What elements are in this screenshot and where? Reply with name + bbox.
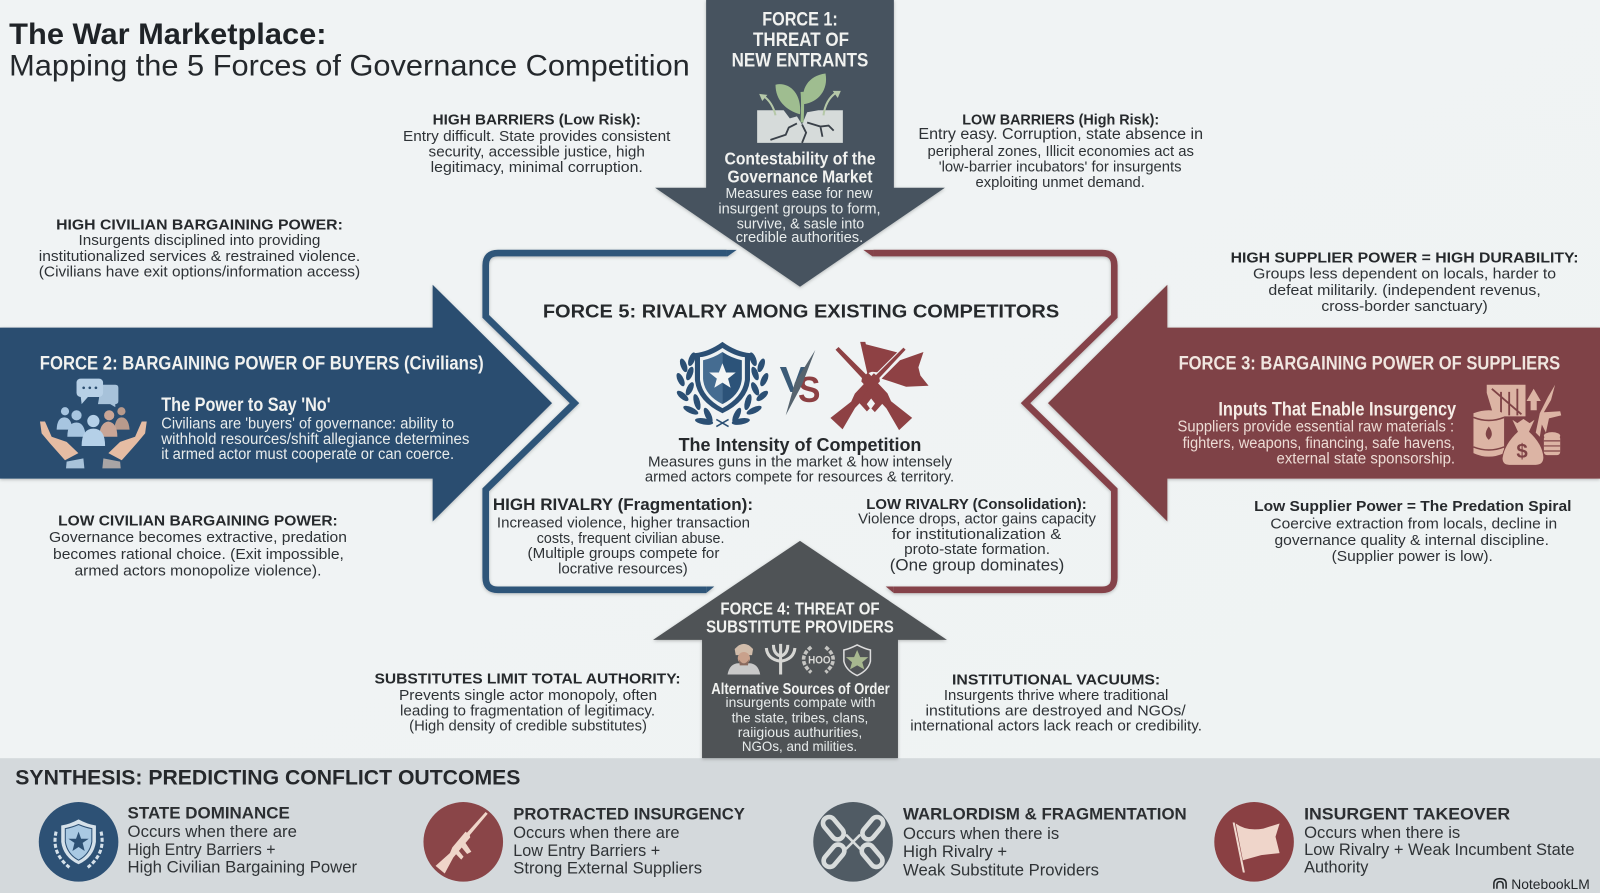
icons: alternative providers bbox=[728, 644, 870, 676]
heading: force 1: FORCE 1: bbox=[762, 9, 838, 31]
panel: force 3 bargaining power of suppliers bbox=[1048, 285, 1600, 521]
text: insurgent takeover bbox=[1304, 805, 1574, 876]
panel: force 4 threat of substitute providers bbox=[653, 541, 947, 758]
text: warlordism: Weak Substitute Providers bbox=[903, 862, 1099, 880]
text block: low rivalry: Violence drops, actor gains capacity bbox=[858, 511, 1097, 527]
heading: force 4 bbox=[706, 598, 894, 637]
text block: high supplier power bbox=[1231, 250, 1579, 315]
text block: low rivalry: (One group dominates) bbox=[890, 556, 1064, 574]
text block: force 4 description: raiigious authurities, bbox=[738, 725, 862, 740]
text block: low supplier power: (Supplier power is low). bbox=[1332, 549, 1493, 565]
title bbox=[9, 18, 690, 83]
text block: low supplier power bbox=[1254, 499, 1571, 565]
text block: high rivalry: costs, frequent civilian abuse. bbox=[537, 531, 724, 547]
heading: force 4: SUBSTITUTE PROVIDERS bbox=[706, 617, 894, 637]
text block: high supplier power: defeat militarily. (independent revenus, bbox=[1268, 283, 1541, 299]
icon: flag badge bbox=[1214, 802, 1294, 882]
text block: high civilian bargaining power: (Civilians have exit options/information access) bbox=[39, 265, 360, 281]
title: The War Marketplace: bbox=[9, 18, 327, 51]
text block: force 3 description: fighters, weapons, financing, safe havens, bbox=[1183, 435, 1455, 452]
text block: low barriers: exploiting unmet demand. bbox=[976, 175, 1145, 191]
icon: crossed rifles and flag bbox=[822, 342, 929, 437]
outcome: state dominance bbox=[39, 802, 358, 882]
text block: substitutes limit authority: leading to fragmentation of legitimacy. bbox=[400, 703, 655, 719]
text block: high rivalry: locrative resources) bbox=[558, 561, 688, 577]
text: protracted insurgency: Low Entry Barriers + bbox=[513, 842, 660, 860]
text: insurgent takeover: Low Rivalry + Weak Incumbent State bbox=[1304, 841, 1574, 859]
text: protracted insurgency: PROTRACTED INSURGENCY bbox=[513, 805, 745, 823]
subheading: the power to say no: The Power to Say 'No' bbox=[161, 394, 331, 416]
text: state dominance: STATE DOMINANCE bbox=[128, 804, 290, 822]
text: protracted insurgency bbox=[513, 805, 745, 877]
text block: substitutes limit authority: SUBSTITUTES LIMIT TOTAL AUTHORITY: bbox=[374, 672, 681, 688]
outcome: protracted insurgency bbox=[423, 802, 745, 882]
icon: shield badge bbox=[39, 802, 118, 882]
frame: red right bracket bbox=[863, 250, 1114, 593]
text block: institutional vacuums: institutions are destroyed and NGOs/ bbox=[926, 703, 1187, 719]
text block: high supplier power: cross-border sanctuary) bbox=[1321, 299, 1488, 315]
panel: synthesis band bbox=[0, 758, 1600, 893]
text block: institutional vacuums: INSTITUTIONAL VACUUMS: bbox=[952, 673, 1160, 689]
text block: low civilian bargaining power: Governance becomes extractive, predation bbox=[49, 530, 347, 546]
text block: high rivalry: (Multiple groups compete for bbox=[528, 546, 719, 562]
text block: intensity description bbox=[645, 454, 954, 486]
text block: force 1 description: insurgent groups to form, bbox=[718, 201, 881, 217]
text block: high rivalry: Increased violence, higher transaction bbox=[497, 516, 750, 532]
text block: high rivalry: HIGH RIVALRY (Fragmentation): bbox=[493, 495, 753, 514]
text block: low civilian bargaining power: armed actors monopolize violence). bbox=[74, 564, 321, 580]
icon: star shield bbox=[844, 645, 870, 676]
arrow: force 2 bbox=[0, 285, 552, 521]
icon: versus: V bbox=[780, 360, 807, 400]
text: warlordism: Occurs when there is bbox=[903, 825, 1059, 843]
heading: force 5: FORCE 5: RIVALRY AMONG EXISTING COMPETITORS bbox=[543, 300, 1059, 321]
icon: HOO laurel bbox=[804, 647, 833, 672]
text block: high civilian bargaining power: Insurgents disciplined into providing bbox=[79, 233, 320, 249]
text block: low supplier power: Coercive extraction from locals, decline in bbox=[1270, 517, 1557, 533]
text block: low civilian bargaining power: LOW CIVILIAN BARGAINING POWER: bbox=[58, 514, 338, 530]
text block: high supplier power: Groups less dependent on locals, harder to bbox=[1253, 267, 1556, 283]
icon: versus bbox=[780, 350, 820, 415]
panel: force 5 rivalry frame bbox=[486, 250, 1114, 593]
text block: force 4 description bbox=[726, 695, 876, 754]
text block: institutional vacuums: international actors lack reach or credibility. bbox=[910, 719, 1202, 735]
text block: force 1 description: credible authorities. bbox=[736, 230, 863, 246]
frame: blue left bracket bbox=[486, 250, 737, 593]
subheading: inputs that enable insurgency: Inputs That Enable Insurgency bbox=[1218, 398, 1456, 420]
text block: low supplier power: Low Supplier Power = The Predation Spiral bbox=[1254, 499, 1571, 515]
text block: high civilian bargaining power: institutionalized services & restrained violence. bbox=[39, 249, 360, 265]
arrow: force 3 bbox=[1048, 285, 1600, 521]
text block: force 1 description bbox=[718, 186, 881, 246]
icon: supplies crate barrel money rifle: $ bbox=[1516, 441, 1528, 463]
text block: high rivalry bbox=[493, 495, 753, 577]
text block: institutional vacuums bbox=[910, 673, 1202, 735]
icon: broken chains badge bbox=[813, 802, 893, 882]
text block: low supplier power: governance quality & internal discipline. bbox=[1274, 533, 1549, 549]
text block: high supplier power: HIGH SUPPLIER POWER = HIGH DURABILITY: bbox=[1231, 250, 1579, 266]
heading: force 1: NEW ENTRANTS bbox=[732, 49, 868, 71]
text block: institutional vacuums: Insurgents thrive where traditional bbox=[944, 688, 1168, 704]
text block: force 1 description: survive, & sasle into bbox=[737, 217, 864, 233]
heading: force 2: FORCE 2: BARGAINING POWER OF BUYERS (Civilians) bbox=[40, 352, 484, 374]
text block: force 2 description: Civilians are 'buyers' of governance: ability to bbox=[161, 416, 454, 433]
text block: high civilian bargaining power bbox=[39, 218, 360, 281]
text block: low barriers: peripheral zones, Illicit economies act as bbox=[928, 144, 1194, 160]
text block: force 3 description: Suppliers provide essential raw materials : bbox=[1178, 419, 1454, 436]
heading: force 1: THREAT OF bbox=[753, 29, 849, 51]
heading: force 4: FORCE 4: THREAT OF bbox=[720, 598, 880, 618]
icon: supplies crate barrel money rifle bbox=[1473, 385, 1561, 465]
heading: synthesis: SYNTHESIS: PREDICTING CONFLICT OUTCOMES bbox=[15, 766, 520, 790]
text block: low rivalry: LOW RIVALRY (Consolidation): bbox=[866, 497, 1087, 513]
panel: force 2 bargaining power of buyers bbox=[0, 285, 552, 521]
text: state dominance: High Entry Barriers + bbox=[128, 841, 276, 859]
text: warlordism: WARLORDISM & FRAGMENTATION bbox=[903, 805, 1187, 823]
logo: NotebookLM: NotebookLM bbox=[1511, 877, 1590, 892]
text block: intensity description: armed actors compete for resources & territory. bbox=[645, 470, 954, 486]
icon: rifle badge bbox=[423, 802, 503, 882]
text block: high barriers: HIGH BARRIERS (Low Risk): bbox=[433, 113, 641, 129]
text block: low barriers: 'low-barrier incubators' for insurgents bbox=[939, 159, 1182, 175]
text block: force 2 description bbox=[160, 416, 470, 463]
text: protracted insurgency: Occurs when there are bbox=[513, 824, 680, 842]
arrow: force 1 bbox=[655, 0, 945, 287]
outcome: warlordism and fragmentation bbox=[813, 802, 1187, 882]
text block: low rivalry bbox=[858, 497, 1097, 574]
heading: intensity of competition: The Intensity of Competition bbox=[679, 434, 921, 455]
text: state dominance bbox=[128, 804, 358, 876]
outcome: insurgent takeover bbox=[1214, 802, 1574, 882]
text block: force 2 description: withhold resources/shift allegiance determines bbox=[160, 431, 470, 448]
text block: force 3 description: external state sponsorship. bbox=[1277, 450, 1455, 467]
text: warlordism: High Rivalry + bbox=[903, 843, 1007, 861]
text block: low civilian bargaining power: becomes rational choice. (Exit impossible, bbox=[53, 547, 344, 563]
text block: low civilian bargaining power bbox=[49, 514, 347, 580]
icon: tribal elder bbox=[728, 644, 760, 675]
text block: force 2 description: it armed actor must cooperate or can coerce. bbox=[161, 446, 454, 463]
subheading: contestability bbox=[724, 148, 876, 187]
text block: force 1 description: Measures ease for new bbox=[726, 186, 873, 202]
subheading: alternative sources of order: Alternative Sources of Order bbox=[711, 681, 890, 698]
icon: civilians in open hands bbox=[40, 379, 147, 468]
text block: force 3 description bbox=[1178, 419, 1455, 467]
heading: force 1 bbox=[732, 9, 868, 71]
text: protracted insurgency: Strong External Suppliers bbox=[513, 859, 702, 877]
text block: substitutes limit authority: Prevents single actor monopoly, often bbox=[399, 688, 657, 704]
text block: low rivalry: for institutionalization & bbox=[892, 527, 1061, 543]
text block: intensity description: Measures guns in the market & how intensely bbox=[648, 454, 953, 470]
title: Mapping the 5 Forces of Governance Competition bbox=[9, 50, 690, 83]
text block: force 4 description: NGOs, and milities. bbox=[742, 739, 857, 754]
text block: substitutes limit authority bbox=[374, 672, 681, 735]
text block: substitutes limit authority: (High density of credible substitutes) bbox=[409, 719, 647, 735]
text block: low barriers bbox=[918, 113, 1203, 191]
text block: high barriers: legitimacy, minimal corruption. bbox=[431, 160, 643, 176]
arrow: force 4 bbox=[653, 541, 947, 758]
text block: high civilian bargaining power: HIGH CIVILIAN BARGAINING POWER: bbox=[56, 218, 343, 234]
text block: low barriers: Entry easy. Corruption, state absence in bbox=[918, 126, 1203, 143]
text block: high barriers: security, accessible justice, high bbox=[429, 145, 645, 161]
text block: high barriers: Entry difficult. State provides consistent bbox=[403, 129, 670, 145]
text block: high barriers bbox=[403, 113, 670, 176]
text: warlordism bbox=[903, 805, 1187, 880]
icon: versus: S bbox=[798, 370, 820, 410]
subheading: contestability: Governance Market bbox=[728, 167, 873, 187]
icon: sprout cracking soil bbox=[757, 73, 843, 143]
text block: force 4 description: insurgents compate with bbox=[726, 695, 876, 710]
text block: force 4 description: the state, tribes, clans, bbox=[732, 710, 868, 725]
icon: shield with laurel bbox=[675, 342, 770, 427]
icon: HOO laurel: HOO bbox=[808, 654, 831, 666]
icon: trident bbox=[766, 644, 795, 675]
text: insurgent takeover: Occurs when there is bbox=[1304, 824, 1460, 842]
text: state dominance: High Civilian Bargaining Power bbox=[128, 858, 358, 876]
text: insurgent takeover: INSURGENT TAKEOVER bbox=[1304, 805, 1510, 823]
text: insurgent takeover: Authority bbox=[1304, 858, 1369, 876]
text block: low rivalry: proto-state formation. bbox=[904, 542, 1050, 558]
text: state dominance: Occurs when there are bbox=[128, 823, 297, 841]
subheading: contestability: Contestability of the bbox=[724, 148, 876, 168]
panel: force 1 threat of new entrants bbox=[655, 0, 945, 287]
text block: low barriers: LOW BARRIERS (High Risk): bbox=[962, 113, 1159, 129]
